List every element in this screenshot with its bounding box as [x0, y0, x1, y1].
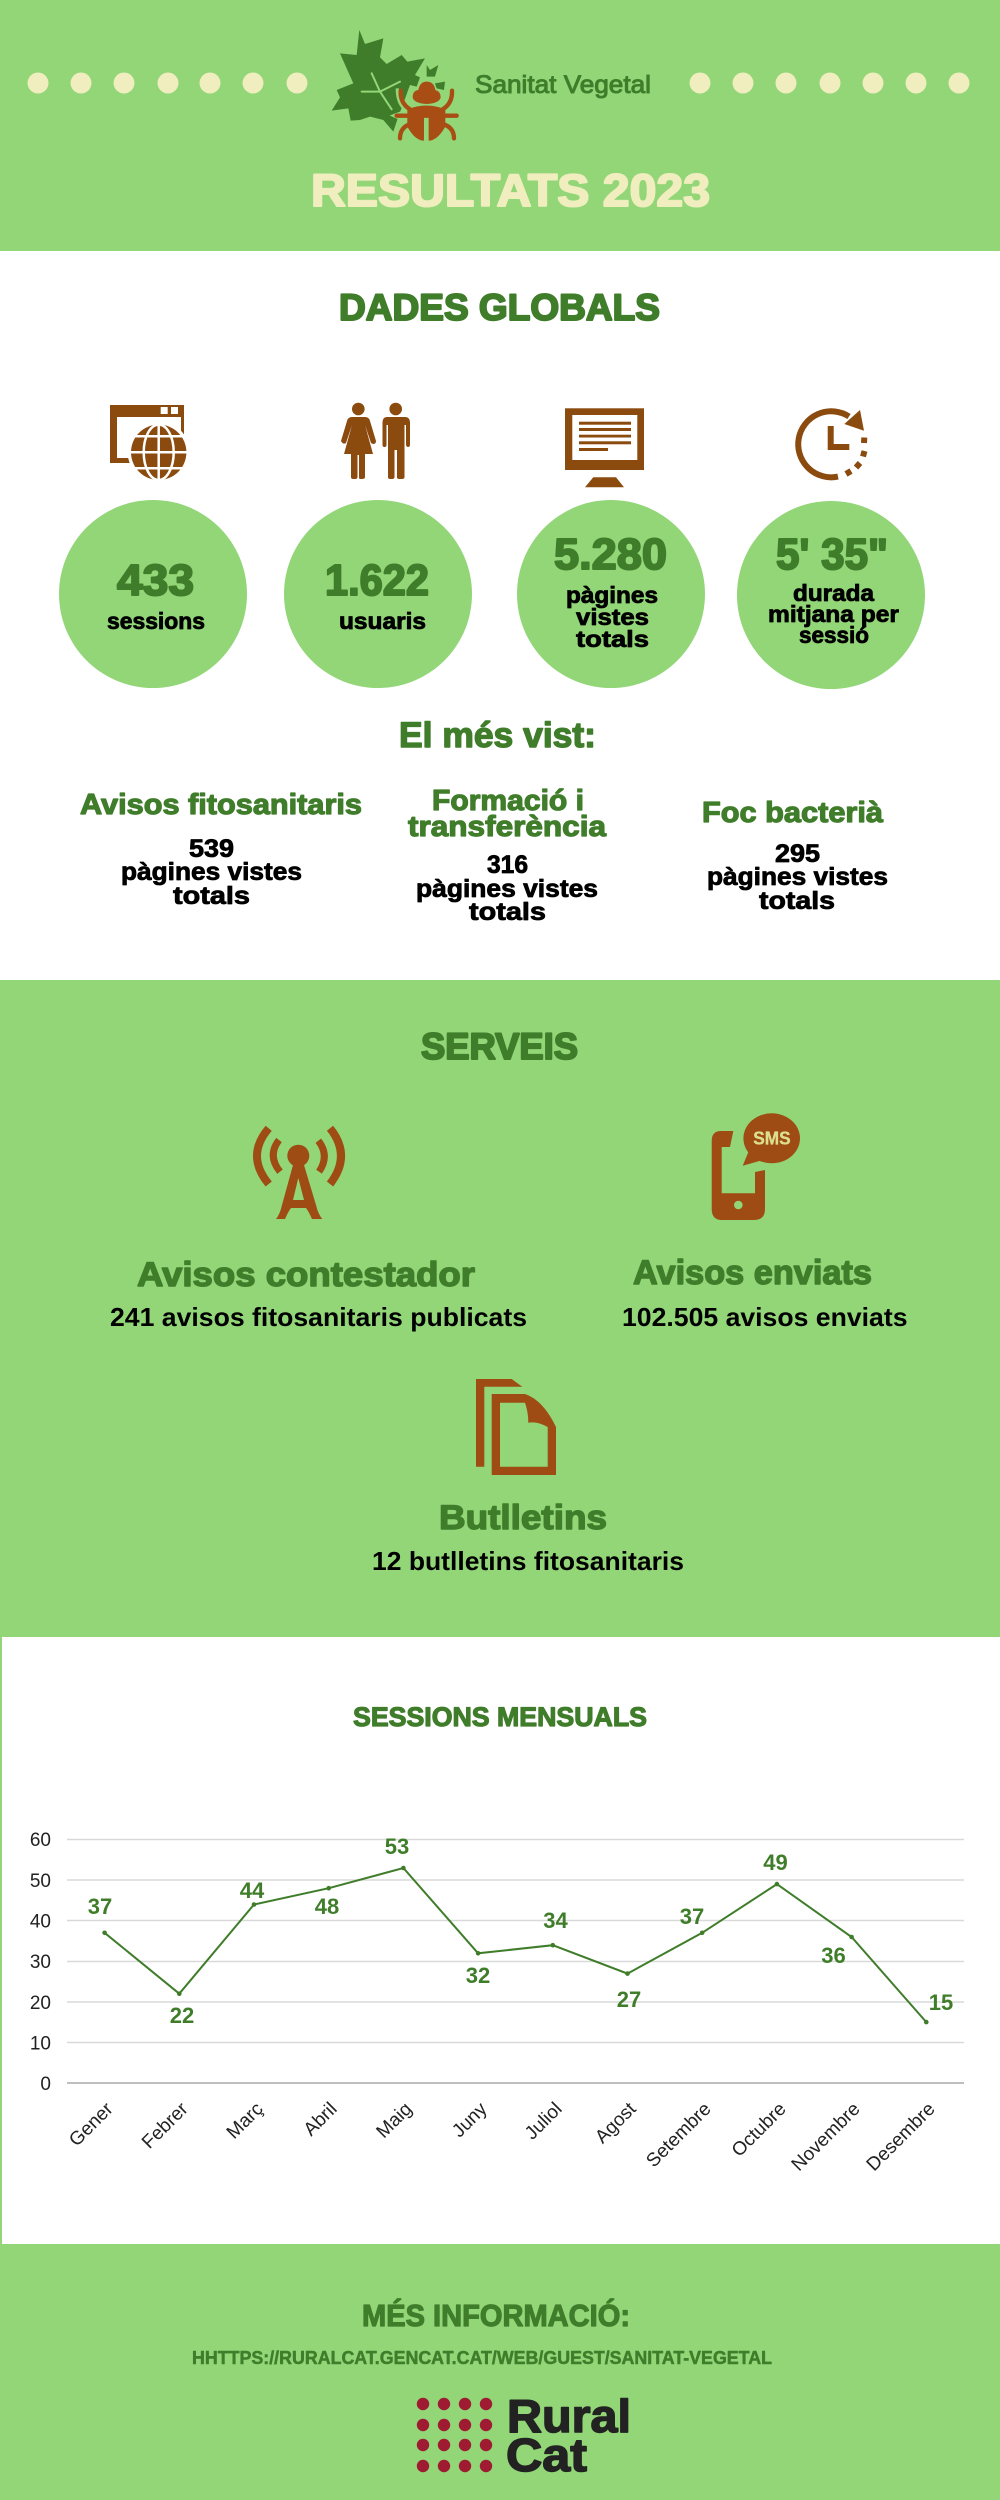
line chart: 30 [30, 1952, 51, 1973]
icon: window with globe [110, 405, 190, 483]
panel: dades globals [59, 287, 925, 926]
panel: serveis [0, 980, 1000, 1637]
stat circle: pagines vistes: vistes [576, 604, 649, 630]
heading: DADES GLOBALS [339, 287, 660, 328]
service: butlletins: 12 butlletins fitosanitaris [372, 1546, 684, 1576]
most viewed: formacio [408, 785, 607, 926]
url: HHTTPS://RURALCAT.GENCAT.CAT/WEB/GUEST/SANITAT-VEGETAL [192, 2348, 772, 2368]
line chart: 50 [30, 1871, 51, 1892]
icon: monitor [565, 408, 644, 487]
line chart: Març [223, 2099, 268, 2143]
panel: sessions mensuals [0, 1637, 964, 2244]
service: avisos enviats: Avisos enviats [633, 1254, 872, 1292]
panel: header [0, 0, 1000, 251]
line chart: 22 [170, 2003, 194, 2028]
line chart: 15 [929, 1990, 953, 2015]
stat circle: usuaris [284, 500, 472, 688]
dots right [690, 72, 970, 94]
line chart: 60 [30, 1830, 51, 1851]
icon: leaf and beetle logo [332, 30, 459, 141]
stat circle: pagines vistes: totals [576, 626, 649, 652]
line chart: Gener [65, 2098, 118, 2151]
line chart: Juny [448, 2098, 492, 2142]
icon: phone with SMS bubble: SMS [753, 1128, 791, 1148]
stat circle: sessions [59, 500, 247, 688]
most viewed: formacio: 316 [487, 851, 528, 879]
service: avisos contestador [110, 1256, 527, 1332]
icon: clock with arrow [798, 410, 864, 477]
line chart: 53 [385, 1834, 409, 1859]
stat circle: durada [737, 501, 925, 689]
icon: phone with SMS bubble [712, 1113, 800, 1220]
most viewed: formacio: pàgines vistes [416, 875, 598, 903]
stat circle: pagines vistes [517, 500, 705, 688]
icon: documents [476, 1379, 556, 1475]
most viewed: formacio: totals [469, 898, 546, 926]
stat circle: sessions: sessions [107, 608, 205, 634]
line chart: 48 [315, 1894, 339, 1919]
stat circle: durada: sessió [799, 622, 869, 648]
line chart: Febrer [138, 2098, 193, 2153]
stat circle: durada: mitjana per [768, 601, 899, 627]
heading: MÉS INFORMACIÓ: [362, 2297, 630, 2333]
line chart: Agost [591, 2098, 641, 2148]
service: avisos contestador: 241 avisos fitosanitaris publicats [110, 1302, 527, 1332]
stat circle: durada: durada [793, 580, 874, 606]
stat circle: usuaris: usuaris [339, 608, 426, 634]
most viewed: avisos fitosanitaris: Avisos fitosanitaris [80, 789, 362, 821]
line chart: Octubre [728, 2099, 791, 2161]
most viewed: foc bacteria: pàgines vistes [707, 863, 888, 891]
line chart: 49 [763, 1850, 788, 1875]
most viewed: foc bacteria: 295 [775, 840, 820, 868]
heading: SESSIONS MENSUALS [353, 1702, 647, 1732]
logo: RuralCat: Cat [506, 2429, 587, 2481]
service: butlletins: Butlletins [439, 1499, 607, 1537]
service: avisos enviats [622, 1254, 908, 1332]
most viewed: avisos fitosanitaris: 539 [189, 835, 234, 863]
line chart: Setembre [642, 2099, 716, 2172]
dots left [28, 72, 308, 94]
line chart: 36 [821, 1943, 846, 1968]
subheading: El més vist: [399, 716, 596, 755]
line chart: 0 [40, 2074, 51, 2095]
line chart: 27 [617, 1987, 641, 2012]
line chart: Desembre [863, 2099, 940, 2176]
stat circle: usuaris: 1.622 [325, 556, 429, 605]
most viewed: foc bacteria: Foc bacterià [702, 797, 884, 829]
stat circle: pagines vistes: pàgines [566, 582, 658, 608]
most viewed: formacio: Formació i [432, 785, 584, 817]
line chart: 44 [240, 1878, 265, 1903]
line chart [30, 1830, 964, 2176]
most viewed: formacio: transferència [408, 811, 607, 843]
line chart: Maig [373, 2099, 417, 2143]
line chart: Abril [300, 2099, 342, 2140]
service: avisos contestador: Avisos contestador [137, 1256, 475, 1294]
logo text: Sanitat Vegetal [475, 71, 651, 99]
panel: mes informacio [0, 2244, 1000, 2500]
logo: RuralCat: Rural [507, 2390, 631, 2442]
logo: RuralCat [417, 2390, 631, 2481]
most viewed: avisos fitosanitaris: totals [173, 882, 250, 910]
line chart: 20 [30, 1993, 51, 2014]
line chart: 32 [466, 1963, 490, 1988]
service: avisos enviats: 102.505 avisos enviats [622, 1302, 908, 1332]
most viewed: foc bacteria [702, 797, 888, 915]
stat circle: sessions: 433 [117, 556, 194, 605]
stat circle: pagines vistes: 5.280 [554, 530, 667, 579]
stat circle: durada: 5' 35" [776, 530, 888, 579]
line chart: 34 [543, 1908, 568, 1933]
icon: antenna [257, 1128, 341, 1219]
service: butlletins [372, 1499, 684, 1576]
icon: woman and man [341, 403, 410, 479]
heading: SERVEIS [421, 1026, 578, 1067]
line chart: 37 [88, 1894, 112, 1919]
most viewed: avisos fitosanitaris [80, 789, 362, 910]
line chart: 10 [30, 2034, 51, 2054]
line chart: 40 [30, 1912, 51, 1932]
line chart: Novembre [788, 2099, 865, 2176]
most viewed: foc bacteria: totals [759, 887, 835, 915]
most viewed: avisos fitosanitaris: pàgines vistes [121, 858, 302, 886]
line chart: Juliol [521, 2099, 567, 2144]
title: RESULTATS 2023 [311, 165, 710, 216]
line chart: 37 [680, 1904, 704, 1929]
